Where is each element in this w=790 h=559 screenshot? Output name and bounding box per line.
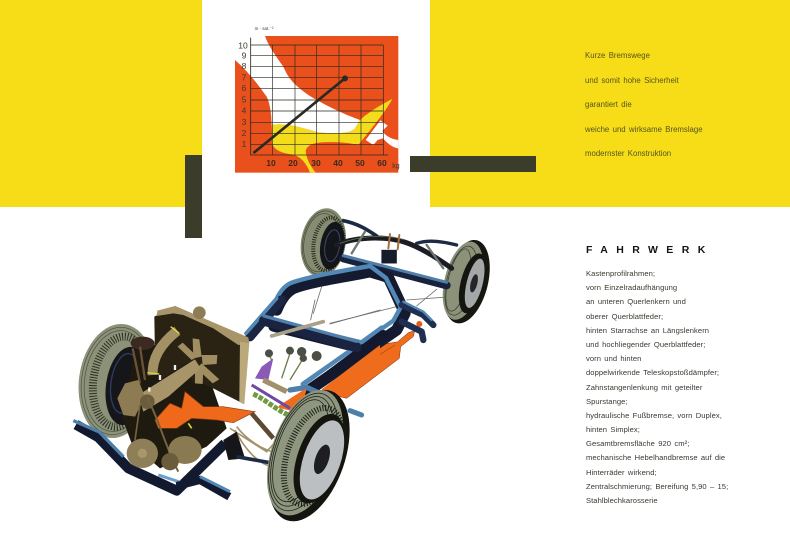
text block: chassis specification: an unteren Querlenkern und bbox=[586, 297, 686, 306]
chart axis labels bbox=[238, 26, 400, 170]
radiator hose bbox=[153, 331, 177, 375]
text block: braking claims: modernster Konstruktion bbox=[585, 149, 671, 158]
text block: braking claims: garantiert die bbox=[585, 100, 632, 109]
text block: braking claims: weiche und wirksame Bremslage bbox=[585, 124, 703, 134]
chart axis labels: m · sat.⁻² bbox=[255, 26, 274, 31]
front wheel: right bbox=[252, 379, 365, 532]
chart axis labels: 10 bbox=[266, 158, 276, 168]
radiator bbox=[154, 306, 249, 404]
text block: chassis specification: hinten Simplex; bbox=[586, 425, 640, 434]
chart axis labels: 50 bbox=[355, 158, 365, 168]
chart axis labels: 20 bbox=[288, 158, 298, 168]
front bumper cross member bbox=[73, 421, 230, 497]
text block: chassis specification: doppelwirkende Teleskopstoßdämpfer; bbox=[586, 368, 719, 377]
chart axis labels: 1 bbox=[242, 139, 247, 149]
dark vertical bar bbox=[185, 155, 202, 238]
text block: chassis specification: Spurstange; bbox=[586, 397, 628, 406]
front wheel: left behind engine bbox=[71, 319, 162, 443]
rear axle and leaf spring bbox=[313, 221, 457, 323]
chart axis labels: 4 bbox=[242, 106, 247, 116]
text block: chassis specification: hydraulische Fußbremse, vorn Duplex, bbox=[586, 411, 722, 420]
frame: blue box-section rails bbox=[273, 266, 433, 391]
text block: chassis specification: Zahnstangenlenkung mit geteilter bbox=[586, 382, 702, 392]
engine bbox=[117, 306, 322, 472]
heading: Fahrwerk: FAHRWERK bbox=[586, 244, 714, 256]
chart axis labels: 7 bbox=[242, 72, 247, 82]
chart axis labels: kg bbox=[392, 163, 400, 170]
chart axis labels: 2 bbox=[242, 128, 247, 138]
text block: chassis specification: Kastenprofilrahmen; bbox=[586, 269, 655, 278]
text block: braking claims: Kurze Bremswege bbox=[585, 51, 650, 60]
text block: chassis specification: Hinterräder wirkend; bbox=[586, 468, 657, 477]
chart axis labels: 10 bbox=[238, 40, 248, 50]
chart axis labels: 9 bbox=[242, 50, 247, 60]
chart axis labels: 6 bbox=[242, 83, 247, 93]
chart axis labels: 60 bbox=[377, 158, 387, 168]
text block: chassis specification: Zentralschmierung; Bereifung 5,90 – 15; bbox=[586, 482, 728, 491]
text block: chassis specification bbox=[586, 269, 728, 505]
yellow panel: right bbox=[430, 0, 790, 207]
text block: chassis specification: Gesamtbremsfläche 920 cm²; bbox=[586, 439, 689, 448]
exhaust manifold: orange bbox=[155, 392, 255, 428]
chart axis labels: 30 bbox=[311, 158, 321, 168]
cylinder head bbox=[138, 359, 201, 412]
belt bbox=[147, 398, 178, 472]
frame: forward section and cross member bbox=[246, 298, 383, 415]
text block: braking claims bbox=[585, 51, 703, 158]
dark horizontal bar bbox=[410, 156, 536, 172]
propeller shaft: orange bbox=[320, 321, 422, 398]
rear wheel: left bbox=[296, 205, 351, 280]
text block: chassis specification: vorn Einzelradaufhängung bbox=[586, 283, 677, 292]
oil filter and fan bbox=[131, 337, 155, 350]
text block: chassis specification: hinten Starrachse an Längslenkern bbox=[586, 326, 709, 335]
text block: chassis specification: und hochliegender Querblattfeder; bbox=[586, 340, 705, 349]
illustration: car chassis bbox=[71, 205, 498, 532]
text block: chassis specification: oberer Querblattfeder; bbox=[586, 312, 663, 321]
front suspension bbox=[230, 427, 280, 467]
chart axis labels: 3 bbox=[242, 117, 247, 127]
text block: chassis specification: mechanische Hebelhandbremse auf die bbox=[586, 453, 725, 462]
rear wheel: right bbox=[436, 235, 498, 328]
text block: braking claims: und somit hohe Sicherheit bbox=[585, 76, 679, 84]
chart axis labels: 8 bbox=[242, 61, 247, 71]
chart axis labels: 5 bbox=[242, 94, 247, 104]
dynamo and starter bbox=[127, 439, 158, 468]
chart axis labels: 40 bbox=[333, 158, 343, 168]
yellow panel: left bbox=[0, 0, 202, 207]
text block: chassis specification: Stahlblechkarosserie bbox=[586, 496, 658, 505]
text block: chassis specification: vorn und hinten bbox=[586, 354, 641, 363]
chart: braking distance bbox=[235, 26, 400, 173]
steering and linkage bbox=[252, 385, 290, 408]
